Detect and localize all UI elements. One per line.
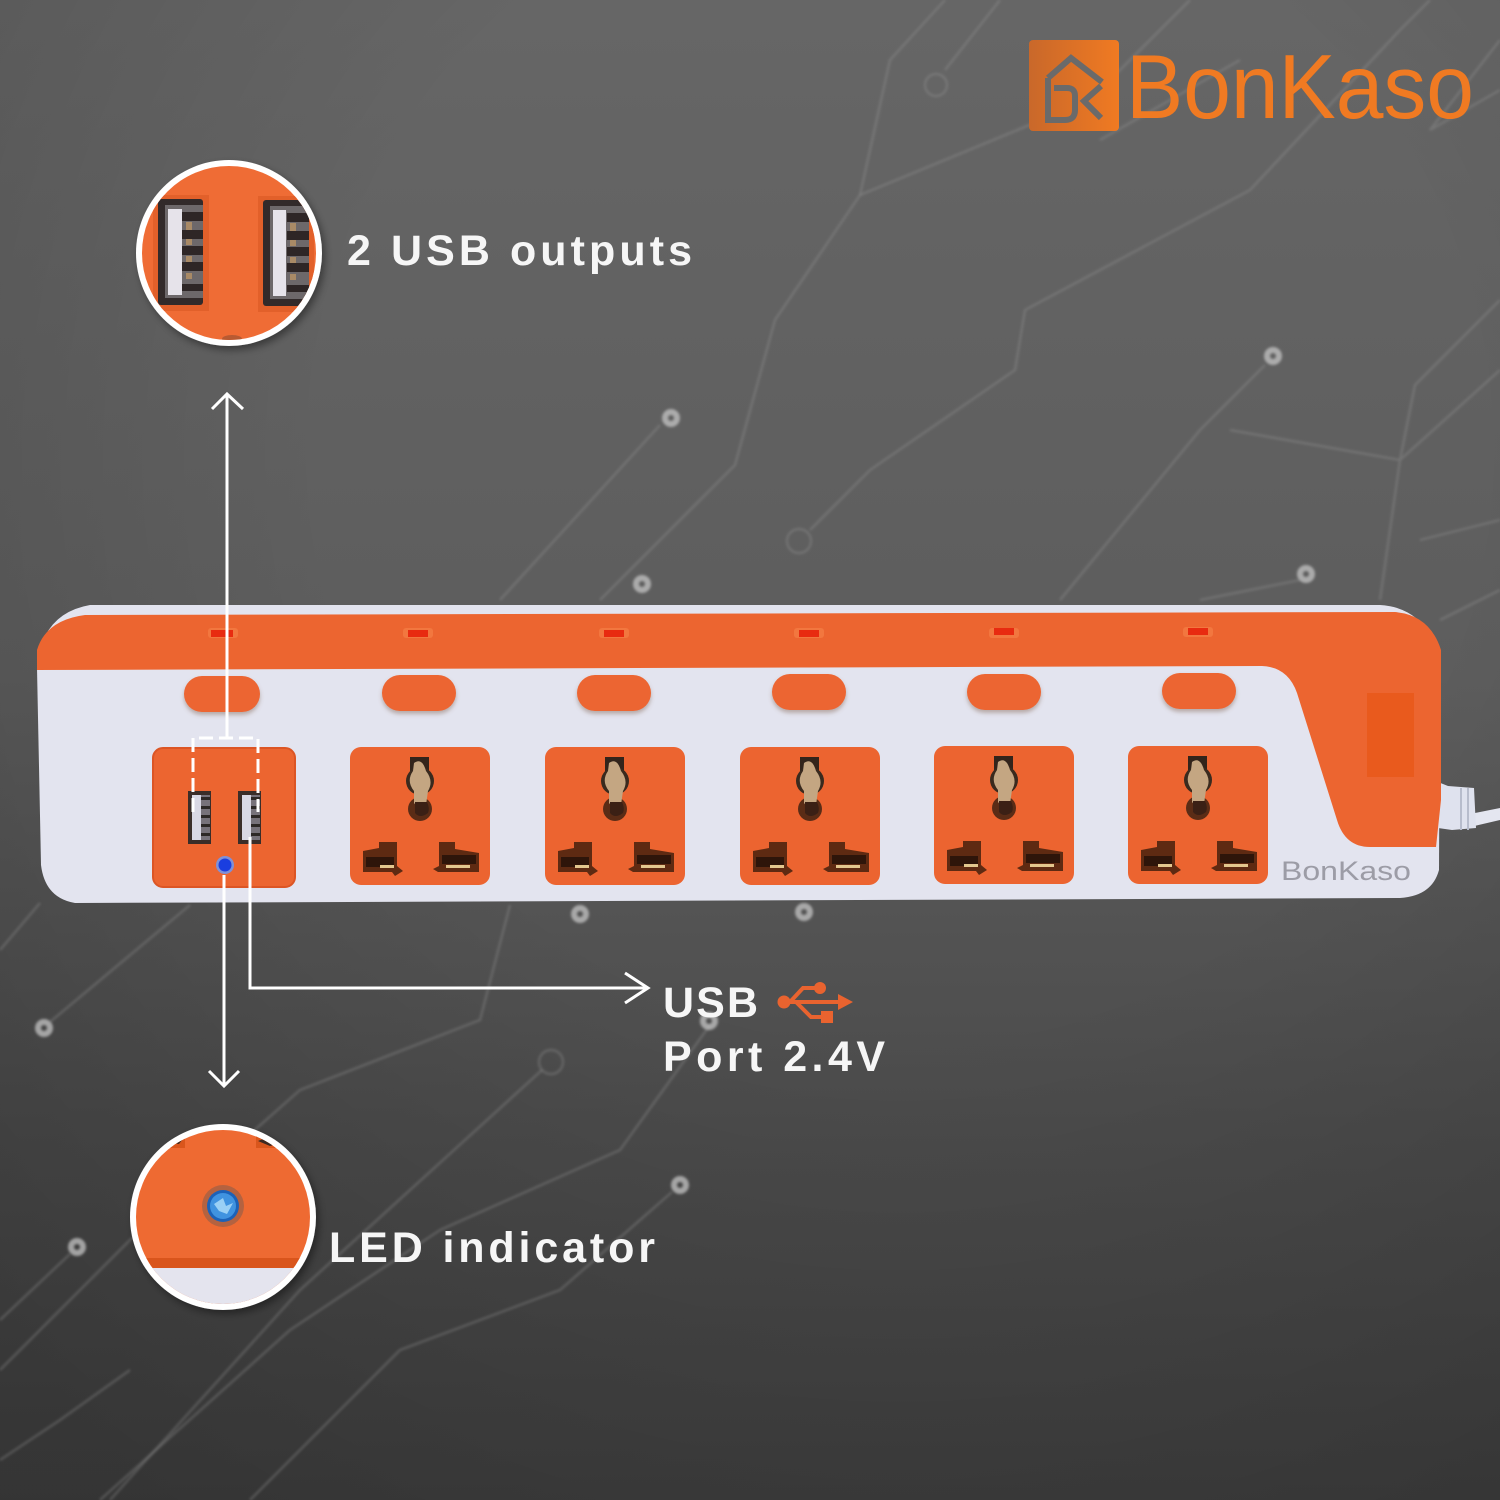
icon: USB symbol xyxy=(778,982,853,1023)
arrow: down to LED indicator xyxy=(209,875,239,1086)
socket 3 xyxy=(740,747,880,885)
rocker switches xyxy=(184,673,1236,712)
dashed highlight box xyxy=(193,738,258,812)
arrow: to USB port label xyxy=(250,837,648,1003)
label: LED indicator: LED indicator xyxy=(329,1224,655,1272)
blue LED xyxy=(202,1185,244,1227)
USB panel xyxy=(153,748,295,887)
right USB port xyxy=(263,200,309,306)
callout: USB outputs magnifier xyxy=(136,160,322,346)
strip body xyxy=(37,605,1440,903)
power cord xyxy=(1438,782,1500,830)
label: USB Port 2.4V xyxy=(663,979,885,1081)
logo icon xyxy=(1029,40,1119,131)
USB port left xyxy=(188,791,211,844)
left USB port xyxy=(158,199,203,305)
socket 2 xyxy=(545,747,685,885)
circuit nodes xyxy=(38,350,1312,1253)
label: USB Port 2.4V: USB xyxy=(663,979,758,1027)
label: USB Port 2.4V: Port 2.4V xyxy=(663,1033,885,1081)
strip brand text: BonKaso xyxy=(1281,856,1411,886)
logo: BonKaso xyxy=(1029,37,1474,138)
callout: LED magnifier xyxy=(130,1124,320,1316)
blue LED dot xyxy=(216,856,234,874)
logo wordmark: BonKaso xyxy=(1126,37,1474,138)
indicator lights xyxy=(208,627,1213,638)
socket 4 xyxy=(934,746,1074,884)
master switch xyxy=(1367,693,1414,777)
label: 2 USB outputs: 2 USB outputs xyxy=(347,227,692,275)
power strip xyxy=(37,605,1441,903)
orange top band and switch housing xyxy=(37,612,1441,847)
socket 1 xyxy=(350,747,490,885)
socket 5 xyxy=(1128,746,1268,884)
arrow: up to USB outputs xyxy=(212,394,243,738)
USB port right xyxy=(238,791,261,844)
